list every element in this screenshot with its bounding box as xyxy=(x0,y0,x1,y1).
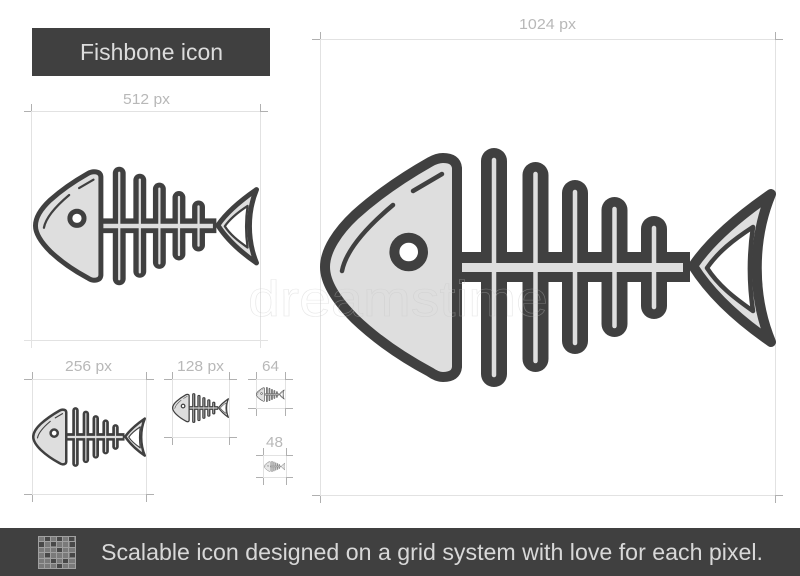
grid frame: 128 px xyxy=(164,372,237,445)
grid frame: 48 px xyxy=(256,448,293,485)
footer text: Scalable icon designed on a grid system with love for each pixel. xyxy=(101,539,763,565)
icon: fishbone 64 px xyxy=(256,388,284,401)
title text: Fishbone icon xyxy=(80,39,223,65)
icon: fishbone 512 px xyxy=(35,172,257,280)
grid frame: 1024 px xyxy=(312,32,783,503)
icon: pixel grid xyxy=(38,536,76,569)
grid frame: 64 px xyxy=(248,372,293,416)
footer bar xyxy=(0,528,800,576)
label: 48: 48 xyxy=(266,434,283,451)
grid frame: 256 px xyxy=(24,372,154,502)
icon: fishbone 256 px xyxy=(33,410,145,464)
label: 512 px: 512 px xyxy=(123,91,171,108)
label: 64: 64 xyxy=(262,358,279,375)
label: 1024 px: 1024 px xyxy=(519,16,577,33)
watermark: dreamstime xyxy=(248,271,548,327)
icon: fishbone 1024 px xyxy=(325,158,771,377)
icon: fishbone 128 px xyxy=(173,394,228,422)
grid frame: 512 px xyxy=(24,104,268,348)
title box xyxy=(32,28,270,76)
label: 128 px: 128 px xyxy=(177,358,225,375)
icon: fishbone 48 px xyxy=(264,461,285,472)
label: 256 px: 256 px xyxy=(65,358,113,375)
